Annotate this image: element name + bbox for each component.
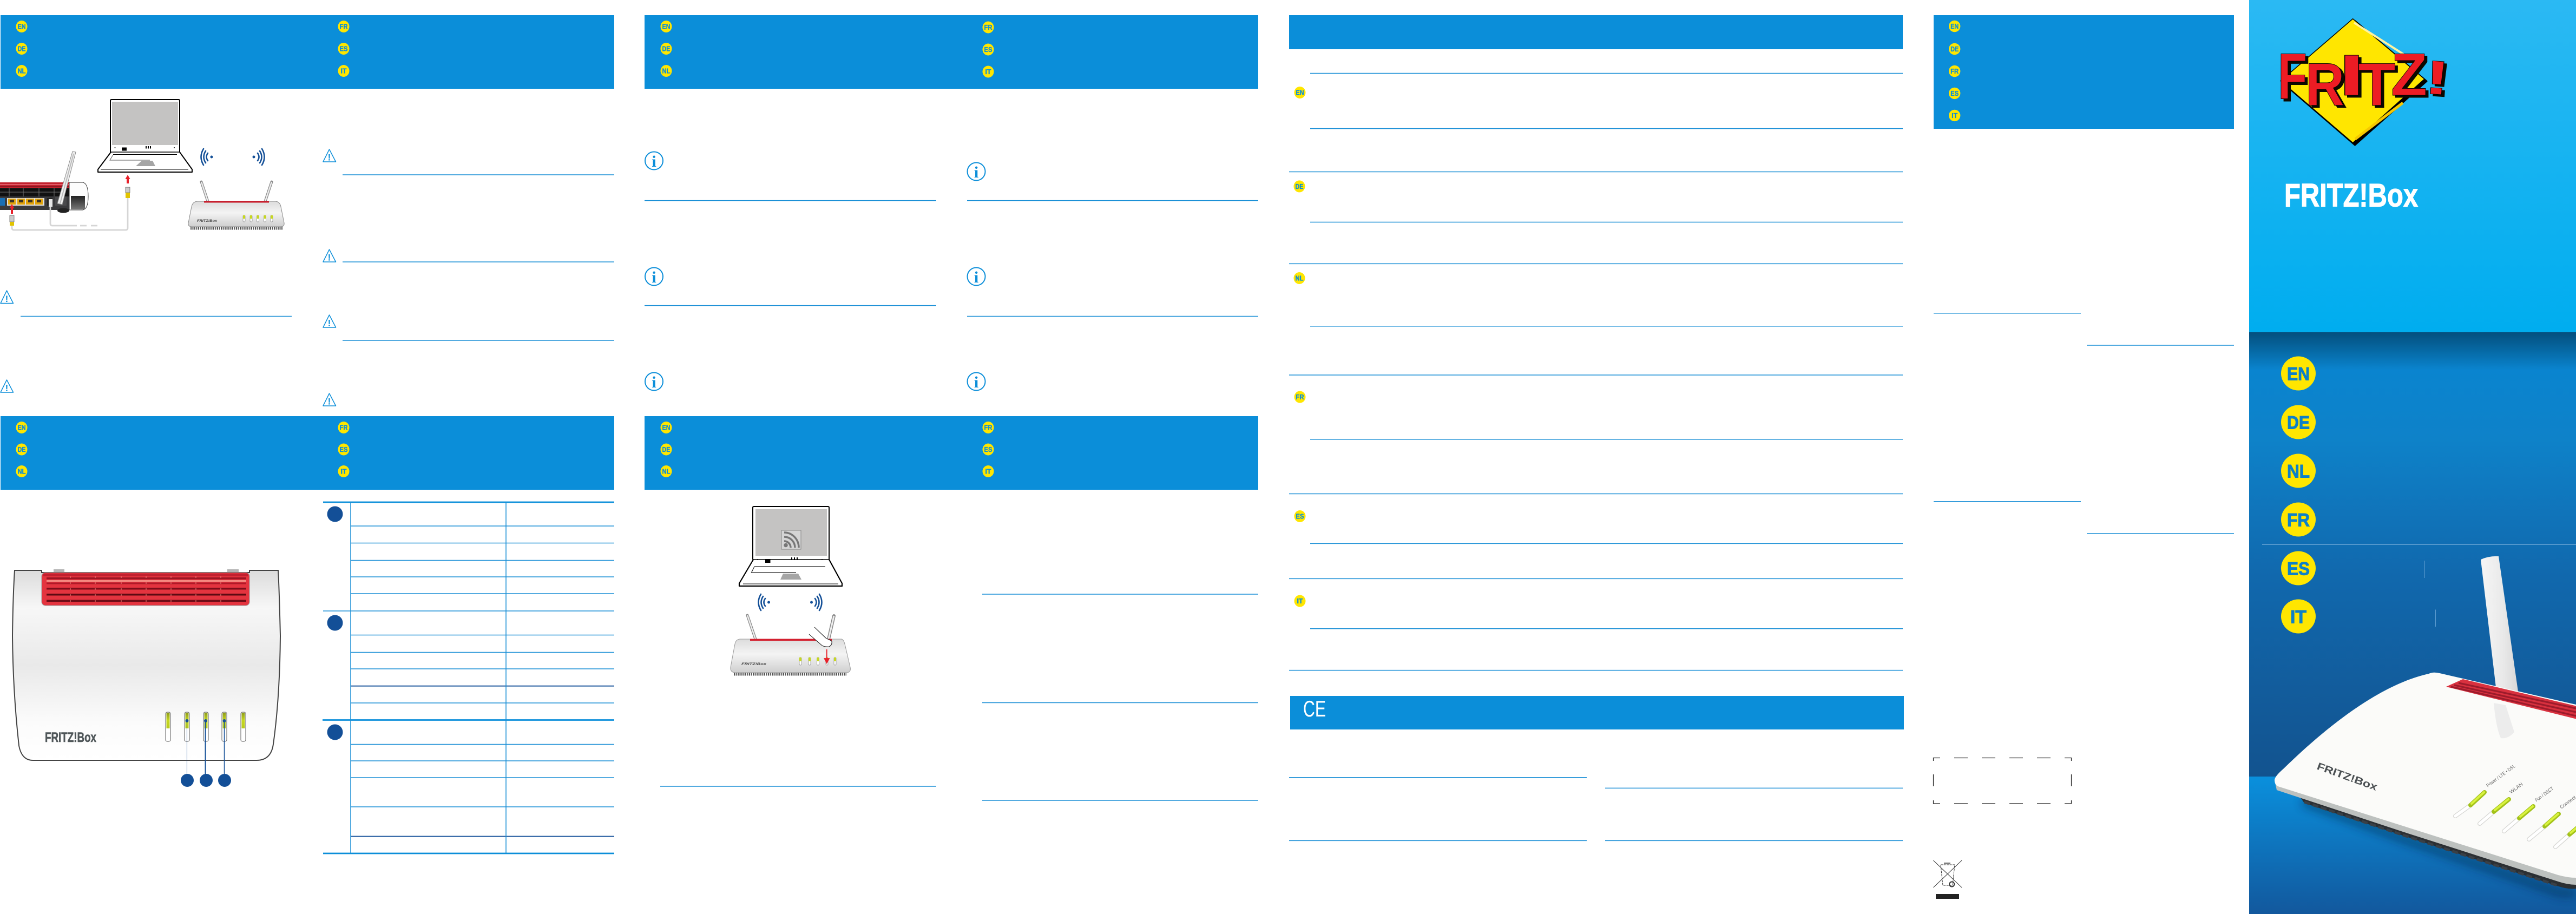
red grille bbox=[2446, 679, 2576, 719]
badge: DE bbox=[16, 43, 27, 55]
LED strip 5 bbox=[2555, 827, 2576, 847]
badge: ES bbox=[338, 444, 350, 456]
icon: wifi waves left bbox=[201, 149, 213, 165]
logo lettering: F bbox=[2281, 43, 2310, 115]
badge: EN bbox=[16, 422, 27, 433]
logo lettering: I bbox=[2338, 43, 2365, 108]
LED strip 2 bbox=[2480, 799, 2509, 824]
cover: sky gradient bbox=[2249, 0, 2576, 332]
product lettering: FRITZ!Box bbox=[45, 730, 96, 745]
device lettering: FRITZ!Box bbox=[2315, 761, 2379, 793]
router shadow bbox=[2303, 802, 2576, 893]
cover: base gradient bbox=[2249, 777, 2576, 914]
arrow: to laptop bbox=[126, 175, 130, 183]
warning icon 5 bbox=[323, 315, 336, 328]
product name: FRITZ!Box bbox=[2284, 177, 2418, 213]
badge: IT: IT bbox=[985, 68, 991, 76]
antenna reflection bbox=[2494, 703, 2514, 738]
router: front small with button press: FRITZ!Box bbox=[741, 662, 767, 666]
warning icon 4: ! bbox=[328, 252, 331, 263]
badge: EN bbox=[660, 21, 672, 32]
badge: DE: DE bbox=[17, 445, 26, 453]
badge: FR bbox=[1949, 65, 1960, 77]
badge: IT: IT bbox=[1297, 597, 1303, 605]
cover badge: FR: FR bbox=[2287, 510, 2310, 530]
router foot bbox=[2301, 798, 2576, 889]
badge: EN bbox=[1949, 21, 1960, 32]
badge: ES bbox=[983, 43, 994, 55]
logo diamond bbox=[2281, 19, 2427, 145]
laptop bbox=[98, 100, 192, 172]
warning icon 1: ! bbox=[5, 294, 8, 304]
red grille bbox=[42, 573, 249, 606]
badge: IT bbox=[338, 65, 350, 77]
info icon 1 bbox=[645, 152, 663, 170]
badge: DE: DE bbox=[17, 44, 26, 53]
badge: FR bbox=[1294, 391, 1305, 403]
badge: ES bbox=[338, 43, 350, 55]
info icon 2: i bbox=[974, 163, 978, 181]
cover panel bbox=[2249, 0, 2576, 914]
logo lettering: F bbox=[2278, 40, 2307, 113]
banner: CE declaration bbox=[1290, 696, 1904, 729]
LED status table bbox=[323, 502, 614, 853]
badge: DE bbox=[1293, 180, 1305, 192]
CE mark: CE bbox=[1303, 696, 1326, 721]
arrow: button press bbox=[825, 649, 829, 663]
dashed sticker frame bbox=[1933, 758, 2072, 804]
badge: FR bbox=[338, 21, 350, 32]
router top surface bbox=[2275, 673, 2576, 878]
router: front small: FRITZ!Box bbox=[197, 220, 218, 223]
banner: panel 4 bbox=[1934, 15, 2234, 129]
cover badge: IT bbox=[2281, 600, 2316, 633]
table marker 3 bbox=[327, 724, 343, 740]
badge: NL: NL bbox=[1296, 274, 1304, 282]
banner: panel 1 top bbox=[1, 15, 614, 89]
illustration: cabled laptop connection bbox=[0, 100, 284, 230]
icon: wifi waves right bbox=[810, 594, 822, 610]
badge: NL: NL bbox=[662, 67, 671, 75]
badge: DE bbox=[16, 444, 27, 456]
antenna bbox=[2481, 556, 2518, 692]
info icon 1: i bbox=[652, 153, 656, 170]
info icon 5 bbox=[645, 372, 663, 391]
router: rear with ports bbox=[0, 152, 88, 213]
badge: EN bbox=[660, 422, 672, 433]
LED strip 3 bbox=[203, 712, 208, 741]
arrow: to LAN port bbox=[10, 204, 14, 214]
plug: laptop side bbox=[126, 187, 130, 198]
LED labels: WLAN bbox=[2508, 781, 2524, 795]
badge: IT bbox=[338, 465, 350, 477]
badge: ES: ES bbox=[340, 44, 348, 53]
info icon 5: i bbox=[652, 373, 656, 391]
badge: IT: IT bbox=[341, 468, 347, 475]
cover router photo bbox=[2275, 556, 2576, 893]
badge: ES: ES bbox=[1950, 89, 1959, 97]
badge: EN bbox=[1294, 87, 1305, 98]
logo lettering: Z bbox=[2391, 42, 2427, 108]
icon: WEEE crossed bin bbox=[1933, 860, 1962, 899]
badge: FR: FR bbox=[984, 23, 993, 31]
info icon 6 bbox=[968, 372, 985, 391]
cover: dark blue gradient bbox=[2249, 332, 2576, 777]
badge: IT bbox=[983, 465, 994, 477]
badge: FR bbox=[983, 422, 994, 433]
LED labels: Fon / DECT bbox=[2534, 786, 2555, 803]
badge: DE: DE bbox=[1950, 45, 1959, 53]
info icon 2 bbox=[968, 162, 985, 181]
banner: panel 2 lower bbox=[645, 416, 1258, 490]
logo lettering: T bbox=[2358, 51, 2396, 119]
panel 3: header bar bbox=[1289, 15, 1903, 49]
badge: ES: ES bbox=[984, 45, 993, 54]
cover badge: ES bbox=[2281, 551, 2316, 586]
router: front small bbox=[188, 182, 284, 228]
LED strip 1 bbox=[166, 712, 170, 741]
badge: DE bbox=[660, 43, 672, 55]
info icon 6: i bbox=[974, 373, 978, 391]
banner: panel 2 top bbox=[645, 15, 1258, 89]
badge: NL: NL bbox=[17, 468, 26, 475]
logo lettering: Z bbox=[2394, 44, 2430, 110]
warning icon 1 bbox=[1, 291, 13, 304]
icon: wifi on screen bbox=[781, 530, 801, 549]
info icon 4: i bbox=[974, 268, 978, 286]
badge: NL bbox=[660, 65, 672, 77]
badge: FR: FR bbox=[340, 23, 348, 30]
cover badge: DE bbox=[2281, 405, 2316, 439]
leader lines and callout dots bbox=[181, 719, 231, 787]
badge: IT: IT bbox=[341, 67, 347, 75]
badge: DE bbox=[1949, 43, 1960, 55]
warning icon 2: ! bbox=[5, 383, 8, 393]
cover badge: ES: ES bbox=[2287, 558, 2310, 579]
icon: wifi waves right bbox=[252, 149, 264, 165]
badge: FR bbox=[338, 422, 350, 433]
badge: IT bbox=[1949, 110, 1960, 121]
cover badge: DE: DE bbox=[2287, 412, 2310, 433]
plug: LAN side bbox=[10, 215, 14, 226]
badge: NL bbox=[16, 65, 27, 77]
router edge bbox=[2275, 780, 2576, 885]
badge: NL: NL bbox=[662, 468, 671, 475]
LED strip 4 bbox=[222, 712, 227, 741]
badge: IT bbox=[983, 66, 994, 78]
warning icon 4 bbox=[323, 249, 336, 263]
badge: DE: DE bbox=[662, 445, 671, 453]
badge: ES: ES bbox=[1296, 512, 1304, 521]
badge: ES bbox=[1294, 510, 1305, 522]
cover badge: NL bbox=[2281, 453, 2316, 488]
badge: NL bbox=[1293, 272, 1305, 284]
badge: NL: NL bbox=[17, 67, 26, 75]
badge: FR: FR bbox=[984, 423, 993, 432]
badge: ES: ES bbox=[340, 445, 348, 453]
logo lettering: ! bbox=[2425, 52, 2455, 108]
icon: pressing finger bbox=[809, 627, 832, 647]
badge: FR: FR bbox=[1296, 393, 1304, 401]
badge: DE: DE bbox=[662, 44, 671, 53]
info icon 3 bbox=[645, 267, 663, 286]
cover badge: EN: EN bbox=[2287, 364, 2310, 384]
FRITZ! logo bbox=[2278, 19, 2455, 145]
info icon 4 bbox=[968, 267, 985, 286]
badge: DE: DE bbox=[1296, 182, 1304, 190]
badge: NL bbox=[660, 465, 672, 477]
badge: IT: IT bbox=[985, 468, 991, 475]
antenna bbox=[57, 152, 76, 205]
logo lettering: ! bbox=[2422, 50, 2452, 106]
badge: FR: FR bbox=[1950, 67, 1959, 75]
cover badge: EN bbox=[2281, 356, 2316, 391]
illustration: FRITZ!Box front with LEDs bbox=[12, 569, 280, 787]
cover badge: IT: IT bbox=[2290, 607, 2306, 628]
warning icon 6: ! bbox=[328, 396, 331, 407]
banner: panel 1 lower bbox=[1, 416, 614, 490]
badge: ES bbox=[1949, 88, 1960, 99]
badge: EN: EN bbox=[1950, 22, 1959, 30]
badge: ES: ES bbox=[984, 445, 993, 453]
LED strip 3 bbox=[2504, 806, 2533, 831]
logo lettering: R bbox=[2305, 51, 2344, 119]
laptop bbox=[739, 507, 842, 586]
badge: EN: EN bbox=[662, 23, 670, 30]
router: front small with button press bbox=[731, 615, 850, 674]
table marker 2 bbox=[327, 615, 343, 631]
badge: FR bbox=[983, 22, 994, 34]
LED strip 2 bbox=[185, 712, 189, 741]
badge: IT: IT bbox=[1951, 111, 1957, 120]
badge: DE bbox=[660, 444, 672, 456]
warning icon 3 bbox=[323, 149, 336, 162]
info icon 3: i bbox=[652, 268, 656, 286]
LED strip 5 bbox=[241, 712, 246, 741]
LED labels bbox=[2485, 764, 2576, 810]
warning icon 5: ! bbox=[328, 318, 331, 328]
badge: EN: EN bbox=[17, 423, 26, 432]
LED strip 1 bbox=[2455, 792, 2485, 816]
icon: wifi waves left bbox=[759, 594, 770, 610]
logo lettering: R bbox=[2308, 54, 2347, 121]
badge: EN: EN bbox=[662, 423, 670, 432]
warning icon 6 bbox=[323, 393, 336, 407]
illustration: WPS connection laptop and router bbox=[731, 507, 850, 674]
cables bbox=[12, 198, 128, 230]
badge: EN: EN bbox=[1296, 89, 1304, 96]
LED strip 4 bbox=[2529, 814, 2559, 839]
badge: ES bbox=[983, 444, 994, 456]
warning icon 2 bbox=[1, 380, 13, 393]
badge: IT bbox=[1294, 595, 1305, 607]
cover badge: NL: NL bbox=[2287, 461, 2310, 482]
logo lettering bbox=[2278, 40, 2455, 121]
badge: NL bbox=[16, 465, 27, 477]
badge: EN: EN bbox=[17, 23, 26, 30]
router body bbox=[12, 570, 280, 760]
logo lettering: T bbox=[2361, 53, 2398, 121]
warning icon 3: ! bbox=[328, 153, 331, 162]
cover badge: FR bbox=[2281, 502, 2316, 537]
logo lettering: I bbox=[2341, 45, 2368, 110]
badge: FR: FR bbox=[340, 423, 348, 432]
table marker 1 bbox=[327, 507, 343, 522]
LED labels: Power / LTE • DSL bbox=[2485, 764, 2516, 788]
badge: EN bbox=[16, 21, 27, 32]
